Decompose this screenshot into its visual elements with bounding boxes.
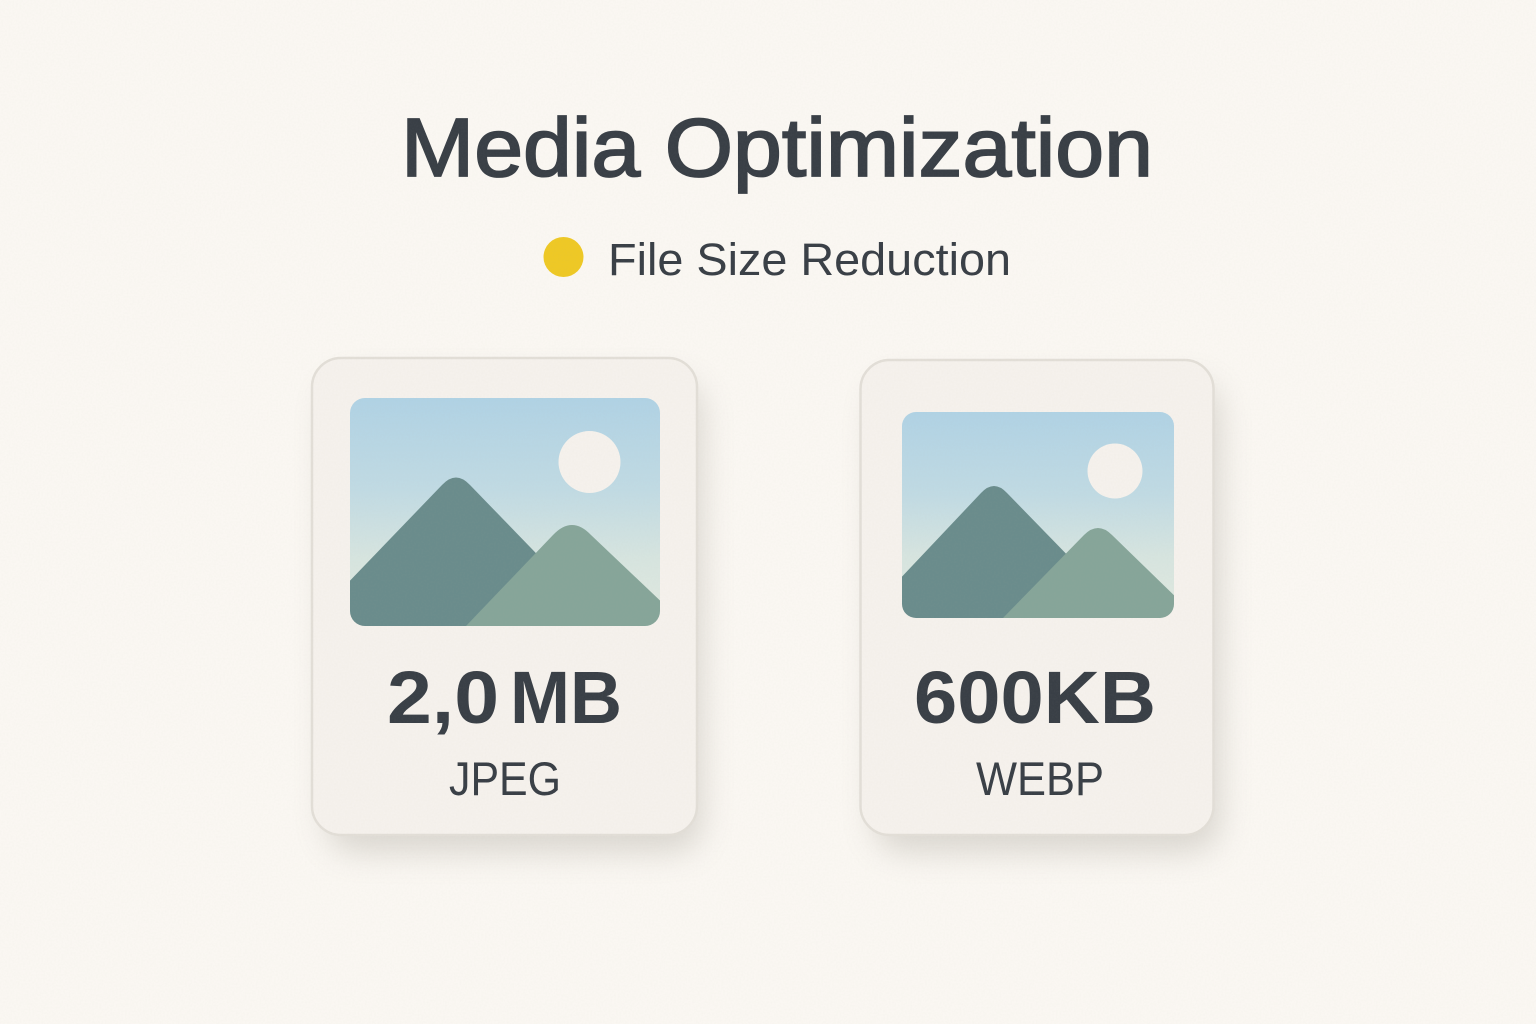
panel: JPEG card: [312, 358, 702, 852]
icon: WEBP landscape image: [902, 412, 1174, 618]
legend: file size reduction: [544, 234, 1011, 285]
legend marker: yellow dot: [544, 237, 584, 277]
title: Media Optimization: [401, 101, 1153, 194]
file size: 2,0 MB: 2,0: [387, 656, 499, 739]
file size: 2,0 MB: MB: [510, 656, 622, 739]
legend label: File Size Reduction: [608, 234, 1011, 285]
icon: JPEG landscape image: [350, 398, 660, 626]
file size: 2,0 MB: [387, 656, 622, 739]
format label: WEBP: WEBP: [976, 752, 1104, 805]
file size: 600KB: 600KB: [914, 656, 1156, 739]
panel: WEBP card: [860, 360, 1220, 852]
format label: JPEG: JPEG: [449, 752, 561, 805]
